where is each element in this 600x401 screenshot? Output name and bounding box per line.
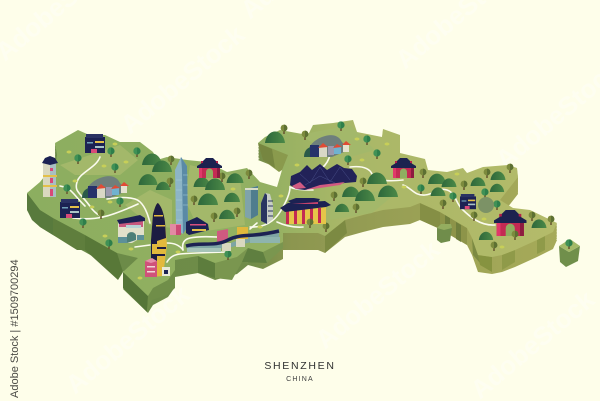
subtitle: CHINA [286,376,314,383]
red gate north [197,158,222,178]
isometric map [27,120,580,313]
houses with rock north [304,135,351,157]
houses with rock west [82,176,129,198]
hills west [138,154,244,219]
purple mountain building [290,164,357,190]
small yellow bushes [66,138,504,280]
long station [186,227,280,252]
red gate east [494,210,526,236]
tree in front of temple [307,219,313,228]
black and gold tower [151,203,170,277]
trees [63,121,573,260]
lighter land patches [60,125,400,232]
pink cube at tower foot [145,258,157,277]
dark building west [60,199,80,218]
small dark building east [460,194,476,209]
pagoda west [42,156,58,197]
hills east [265,132,546,240]
grey bush east [478,197,494,213]
arch gate white [117,215,145,243]
islet south [437,224,452,243]
title: SHENZHEN [264,360,336,372]
map extrusion sides [27,122,557,313]
red gate central [391,158,416,178]
dark building north-west [85,134,105,153]
red temple [280,198,331,224]
pink cube and dark block [170,217,209,235]
blue glass tower [175,157,188,234]
stock id vertical text: Adobe Stock | #1509700294 [9,259,21,398]
island east [559,239,580,267]
tree in front of east gate [512,231,518,240]
roads [60,155,512,262]
map top surface [27,120,557,296]
twin towers [245,186,273,224]
